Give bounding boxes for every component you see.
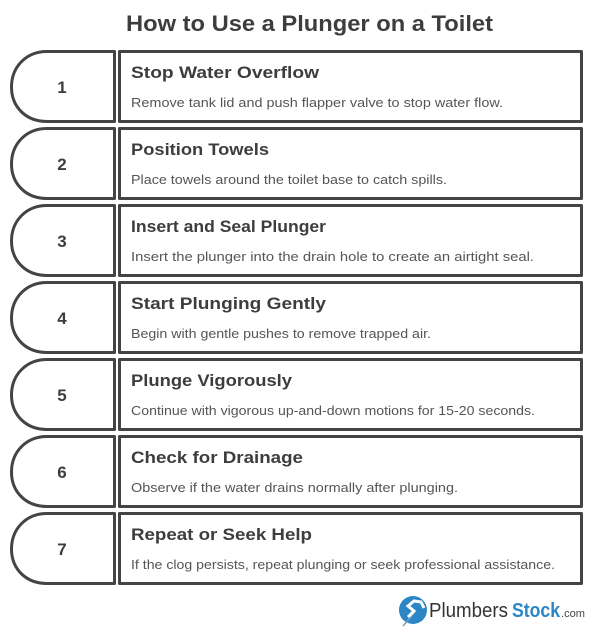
step 7 card <box>120 514 582 584</box>
step 1 card <box>120 52 582 122</box>
step 5 number tab <box>12 360 114 430</box>
logo wordmark: Stock: Stock <box>512 600 561 622</box>
step 4 card: Begin with gentle pushes to remove trapped air. <box>131 327 431 341</box>
step 4 <box>12 282 582 352</box>
title: How to Use a Plunger on a Toilet <box>126 11 494 36</box>
step 6 card: Observe if the water drains normally after plunging. <box>131 481 458 495</box>
step 7 number tab <box>12 514 114 584</box>
step 3 <box>12 206 582 276</box>
step 1 <box>12 52 582 122</box>
step 3 card: Insert and Seal Plunger <box>131 217 326 236</box>
step 6 card <box>120 436 582 506</box>
step 4 card <box>120 282 582 352</box>
step 7 number tab: 7 <box>57 540 67 559</box>
step 2 number tab: 2 <box>57 155 67 174</box>
step 3 number tab <box>12 206 114 276</box>
step 1 number tab <box>12 52 114 122</box>
step 7 <box>12 514 582 584</box>
step 2 card: Place towels around the toilet base to catch spills. <box>131 173 447 187</box>
step 2 card <box>120 128 582 198</box>
step 6 <box>12 436 582 506</box>
step 1 card: Remove tank lid and push flapper valve to stop water flow. <box>131 96 503 110</box>
step 5 card: Plunge Vigorously <box>131 371 293 390</box>
step 7 card: If the clog persists, repeat plunging or seek professional assistance. <box>131 558 555 572</box>
logo wordmark: Plumbers: Plumbers <box>429 600 508 622</box>
step 5 number tab: 5 <box>57 386 67 405</box>
step 4 card: Start Plunging Gently <box>131 294 327 313</box>
logo wordmark: .com: .com <box>561 608 585 620</box>
step 6 number tab <box>12 436 114 506</box>
step 5 card: Continue with vigorous up-and-down motions for 15-20 seconds. <box>131 404 535 418</box>
step 5 card <box>120 360 582 430</box>
step 4 number tab: 4 <box>57 309 67 328</box>
step 7 card: Repeat or Seek Help <box>131 525 312 544</box>
step 6 card: Check for Drainage <box>131 448 303 467</box>
step 1 number tab: 1 <box>57 78 67 97</box>
step 2 <box>12 128 582 198</box>
step 3 number tab: 3 <box>57 232 67 251</box>
step 3 card: Insert the plunger into the drain hole to create an airtight seal. <box>131 250 534 264</box>
step 5 <box>12 360 582 430</box>
icon: wrench badge <box>399 596 427 626</box>
step 1 card: Stop Water Overflow <box>131 63 320 82</box>
logo <box>399 596 585 626</box>
step 6 number tab: 6 <box>57 463 67 482</box>
step 2 number tab <box>12 128 114 198</box>
step 2 card: Position Towels <box>131 140 269 159</box>
step 3 card <box>120 206 582 276</box>
step 4 number tab <box>12 282 114 352</box>
